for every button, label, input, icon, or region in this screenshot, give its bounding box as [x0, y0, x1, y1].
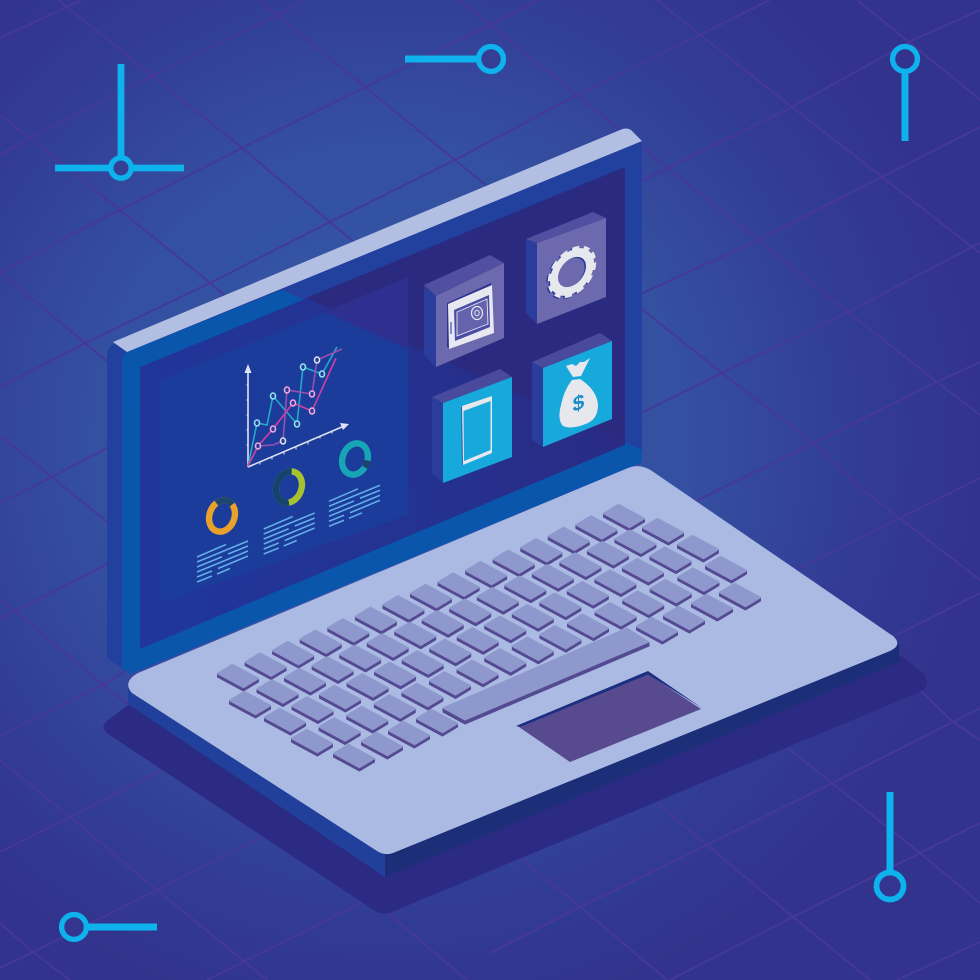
text lines: right block: [329, 485, 380, 526]
chart points: [254, 357, 324, 449]
donut chart: teal: [338, 440, 372, 478]
trackpad: [516, 671, 702, 762]
spacebar: [443, 628, 649, 724]
smartphone icon: [461, 396, 492, 465]
icon tile: smartphone: [432, 369, 512, 483]
connector node: top left: [55, 64, 184, 178]
icon tile: money bag: [532, 333, 612, 447]
screen bezel: [140, 167, 625, 649]
gear icon: [548, 240, 594, 305]
icon tile: gear: [526, 212, 606, 324]
dollar sign: $: [573, 388, 584, 417]
chart series: [248, 347, 337, 466]
laptop: [107, 128, 899, 877]
lid frame: [107, 131, 642, 674]
connector node: top right: [893, 47, 917, 141]
base right side: [385, 643, 899, 877]
safe icon: [447, 283, 494, 349]
chart axes: [244, 364, 349, 467]
connector node: top centre: [405, 47, 503, 71]
lid frame reflection: [122, 290, 642, 674]
laptop lid: [107, 128, 642, 674]
laptop drop shadow: [104, 655, 927, 914]
connector node: bottom right: [876, 792, 904, 900]
dashboard window: [161, 277, 408, 603]
keyboard deck: [128, 466, 897, 854]
text lines: left block: [197, 541, 248, 582]
line chart: [244, 347, 349, 467]
donut chart: green: [272, 468, 306, 506]
donut chart: orange: [205, 497, 239, 535]
connector node: bottom left: [62, 915, 157, 939]
lid top strip: [113, 128, 642, 352]
base left side: [128, 682, 385, 877]
text lines: middle block: [264, 513, 315, 554]
icon tile: safe: [424, 255, 504, 367]
screen dark upper area: [306, 167, 625, 443]
keyboard: [218, 504, 760, 771]
laptop base: [128, 466, 899, 877]
